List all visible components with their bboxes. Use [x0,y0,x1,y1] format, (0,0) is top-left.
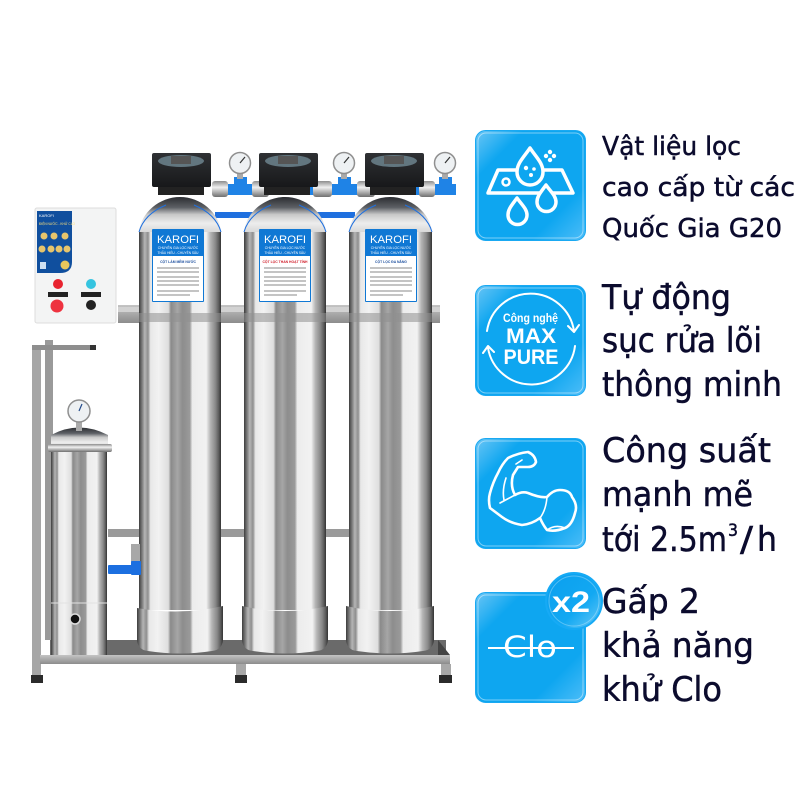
text: chlorine removal [602,582,754,710]
badge: x2 [546,573,602,629]
product label 3: CỘT LỌC ĐA NĂNG [375,259,407,264]
control box sticker [37,211,76,273]
product label 1: THẤU HIỂU - CHUYÊN SÂU [158,250,199,255]
text: chlorine removal: khử Clo [602,670,722,710]
text: chlorine removal: khả năng [602,626,754,666]
text: self-cleaning: thông minh [602,365,782,405]
text: self-cleaning: Tự động [601,278,731,318]
tank 1 [137,153,223,654]
product label 3: THẤU HIỂU - CHUYÊN SÂU [371,250,412,255]
control head 2 [259,153,318,195]
icon: Max Pure [476,286,586,396]
product label 2: CHUYÊN GIA LỌC NƯỚC [265,245,306,250]
control buttons [48,279,101,312]
icon: Max Pure: MAX [506,325,556,348]
text: capacity: / [740,520,754,560]
text: capacity: 3 [728,521,738,541]
product label 1: KAROFI [157,234,199,246]
text: capacity: mạnh mẽ [602,475,753,515]
feature card 4: chlorine removal [476,573,754,710]
text: capacity: tới 2.5m [602,520,727,560]
blue connecting pipes [212,177,456,218]
control box sticker: ĐIỆN NƯỚC - KHỬ CLO [39,221,76,226]
product label 2: THẤU HIỂU - CHUYÊN SÂU [265,250,306,255]
text: filter materials: cao cấp từ các [602,173,795,203]
blue outlet pipe [108,544,141,575]
pressure gauges on tanks [230,152,456,179]
icon: flexed arm [476,438,586,548]
product label 1: CHUYÊN GIA LỌC NƯỚC [158,245,199,250]
badge: x2: x2 [552,586,590,619]
pre-filter gauge [68,400,90,422]
product label 2: KAROFI [264,234,306,246]
product label 3: CHUYÊN GIA LỌC NƯỚC [371,245,412,250]
text: filter materials: Vật liệu lọc [602,132,741,162]
icon: filter materials [476,130,586,240]
tank 3 [346,153,434,654]
text: capacity: Công suất [602,431,771,471]
pre-filter housing [48,400,112,655]
text: capacity: h [757,520,777,560]
text: capacity [602,431,777,560]
control head 3 [365,153,424,195]
icon: chlorine: Clo [503,630,557,664]
text: filter materials: Quốc Gia G20 [602,214,782,244]
product label 3: KAROFI [370,234,412,246]
icon: chlorine [476,592,586,702]
icon: Max Pure: Công nghệ [503,311,558,325]
text: chlorine removal: Gấp 2 [602,582,700,622]
product label 3 [365,229,417,302]
product label 1: CỘT LÀM MỀM NƯỚC [160,259,196,264]
control head 1 [152,153,211,195]
feature card 3: capacity [476,431,777,560]
control box sticker: KAROFI [39,213,54,218]
text: self-cleaning: sục rửa lõi [602,321,762,361]
feature card 1: filter materials [476,130,795,244]
text: self-cleaning [601,278,782,405]
frame: stainless steel rack [31,305,452,683]
icon: Max Pure: PURE [504,346,558,369]
product label 2: CỘT LỌC THAN HOẠT TÍNH [262,259,308,264]
control box [35,208,116,323]
tank 2 [242,153,328,654]
product label 1 [152,229,204,302]
text: filter materials [602,132,795,244]
product label 2 [259,229,311,302]
feature card 2: self-cleaning [476,278,782,405]
